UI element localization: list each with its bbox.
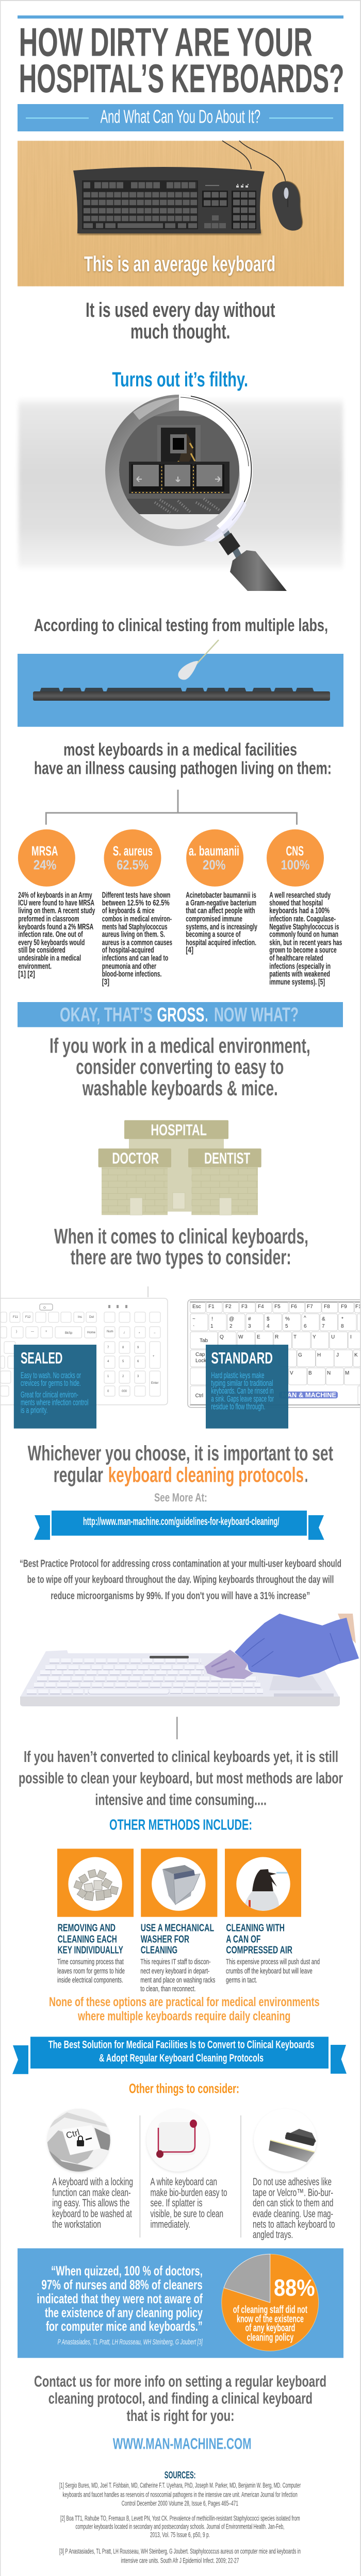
callout: sealed: ments where infection control xyxy=(21,1398,88,1408)
callout: sealed xyxy=(14,1345,96,1429)
panel: standard keyboard: W xyxy=(238,1334,243,1340)
panel: standard keyboard: F1 xyxy=(208,1304,215,1310)
banner: okay that's gross: . xyxy=(205,1004,208,1026)
text: cleaning protocols xyxy=(28,1441,333,1487)
text: the workstation xyxy=(52,2219,101,2230)
method: compressed air xyxy=(225,1849,320,1985)
panel: sealed keyboard: F12 xyxy=(25,1316,31,1319)
text column: S. aureus xyxy=(102,891,172,987)
illustration: hospital, doctor, dentist buildings: DOCTOR xyxy=(112,1149,159,1167)
text: A white keyboard can xyxy=(151,2177,217,2188)
panel: standard keyboard: F5 xyxy=(274,1304,281,1310)
quote xyxy=(37,2263,203,2334)
heading: CLEANING EACH xyxy=(58,1934,117,1945)
panel: sealed keyboard xyxy=(0,1286,168,1405)
text column: S. aureus: aureus living on them. S. xyxy=(102,930,165,939)
panel: sealed keyboard: 3 xyxy=(137,1375,139,1378)
panel: standard keyboard: 8 xyxy=(341,1324,344,1329)
pie chart: 88%: of cleaning staff did not xyxy=(233,2304,307,2315)
method: mechanical washer xyxy=(140,1849,217,1993)
text: cleaning protocols: . xyxy=(305,1463,308,1487)
callout: sealed: SEALED xyxy=(21,1349,62,1367)
pathogen: S. aureus: S. aureus xyxy=(113,844,153,859)
text column: MRSA: keyboards found a 2% MRSA xyxy=(18,923,94,931)
panel: sealed keyboard: ) xyxy=(16,1330,17,1333)
heading xyxy=(58,1922,123,1956)
text: none practical xyxy=(49,1995,320,2024)
description: nect every keyboard in depart- xyxy=(140,1967,209,1976)
panel: standard keyboard: 7 xyxy=(322,1324,325,1329)
pie chart: 88% xyxy=(222,2254,319,2351)
description: ment and place on washing racks xyxy=(140,1976,215,1985)
text column: S. aureus: ments had Staphylococcus xyxy=(102,923,168,931)
text: convert to washable xyxy=(50,1033,310,1100)
heading xyxy=(226,1922,292,1956)
heading: sources: SOURCES: xyxy=(165,2470,196,2481)
text xyxy=(151,2177,227,2230)
panel: standard keyboard: Ctrl xyxy=(195,1393,203,1399)
panel: standard keyboard: 5 xyxy=(285,1324,288,1329)
panel: standard keyboard: * xyxy=(341,1316,343,1322)
quote: the existence of any cleaning policy xyxy=(45,2305,203,2320)
panel: standard keyboard: J xyxy=(336,1352,339,1358)
callout: sealed: Great for clinical environ- xyxy=(21,1391,78,1400)
callout: standard xyxy=(206,1345,288,1429)
text column: CNS: immune systems). [5] xyxy=(269,978,325,987)
pathogen: MRSA: 24% xyxy=(34,858,56,872)
panel: standard keyboard: Y xyxy=(313,1334,316,1340)
sources list: intensive care units. South Afr J Epidemiol Infect. 2009; 22-27 xyxy=(121,2556,239,2564)
text column: MRSA: undesirable in a medical xyxy=(18,954,81,962)
description: germs in tact. xyxy=(226,1976,257,1985)
subtitle band xyxy=(18,104,343,131)
heading: other methods: OTHER METHODS INCLUDE: xyxy=(109,1817,252,1834)
text: angled trays. xyxy=(253,2229,293,2241)
quote: indicated that they were not aware of xyxy=(37,2291,203,2307)
panel: standard keyboard: 3 xyxy=(248,1324,251,1329)
description: leaves room for germs to hide xyxy=(57,1967,125,1976)
icon: ctrl key with lock: Ctrl xyxy=(65,2127,81,2141)
pathogen: MRSA: MRSA xyxy=(31,844,58,859)
brand label: MAN & MACHINE xyxy=(282,1391,336,1399)
panel: sealed keyboard: 5 xyxy=(122,1360,124,1363)
pathogen: CNS: CNS xyxy=(286,844,304,859)
panel: sealed keyboard: + xyxy=(45,1330,47,1333)
heading: A CAN OF xyxy=(226,1934,260,1945)
text column: a. baumanii: Acinetobacter baumannii is xyxy=(186,891,256,900)
text column: a. baumanii: systems, and is increasingly xyxy=(186,923,257,931)
text: contact us xyxy=(34,2372,326,2425)
text column: S. aureus: infections and can lead to xyxy=(102,954,168,962)
sources list: Control December 2000 Volume 28, Issue 6, Pages 465–471 xyxy=(122,2499,238,2507)
description: crumbs off the keyboard but will leave xyxy=(226,1967,313,1976)
panel: standard keyboard: N xyxy=(327,1370,331,1376)
text column: S. aureus: Different tests have shown xyxy=(102,891,170,900)
text column: S. aureus: combos in medical environ- xyxy=(102,915,172,924)
attribution: P Anastasiades, TL Pratt, LH Rousseau, WH Steinberg, G Joubert [3] xyxy=(58,2338,203,2347)
text column: CNS: infections (especially in xyxy=(269,962,331,971)
panel: standard keyboard xyxy=(188,1300,361,1408)
panel: sealed keyboard: / xyxy=(124,1332,125,1335)
banner: okay that's gross xyxy=(18,1002,343,1027)
method: removing keys xyxy=(57,1849,134,1985)
connector lines xyxy=(46,790,297,825)
text column: MRSA: 24% of keyboards in an Army xyxy=(18,891,92,900)
text: ing easy. This allows the xyxy=(52,2198,129,2209)
title block xyxy=(18,15,344,101)
text column: MRSA: ICU were found to have MRSA xyxy=(18,899,94,907)
computer mouse xyxy=(272,181,302,231)
panel: standard keyboard: H xyxy=(317,1352,321,1358)
divider line xyxy=(176,1717,178,1739)
panel: sealed keyboard: 2 xyxy=(122,1375,124,1378)
panel: standard keyboard: ~ xyxy=(192,1316,195,1322)
text column: S. aureus: blood-borne infections. xyxy=(102,970,161,979)
illustration: hospital, doctor, dentist buildings xyxy=(99,1120,261,1215)
pie chart: 88%: know of the existence xyxy=(237,2313,304,2325)
panel: standard keyboard: ` xyxy=(193,1325,194,1331)
description: Time consuming process that xyxy=(57,1958,124,1967)
text: not converted yet: intensive and time consuming.... xyxy=(95,1790,267,1808)
text column: MRSA xyxy=(18,891,95,979)
dividers xyxy=(140,2115,241,2238)
text column: MRSA: living on them. A recent study xyxy=(18,907,95,916)
text column: S. aureus: aureus is a common causes xyxy=(102,938,172,947)
panel: standard keyboard: Q xyxy=(220,1334,224,1340)
heading: KEY INDIVIDUALLY xyxy=(58,1944,123,1956)
text column: MRSA: still be considered xyxy=(18,946,65,955)
sources list: 2013, Vol. 75 Issue 6, p50, 9 p. xyxy=(150,2531,210,2538)
panel: swab testing keyboard xyxy=(18,640,343,727)
illustration: hospital, doctor, dentist buildings: DENTIST xyxy=(204,1149,250,1167)
description: to clean, than reconnect. xyxy=(140,1985,196,1993)
description xyxy=(140,1958,215,1993)
quote: 97% of nurses and 88% of cleaners xyxy=(41,2277,203,2292)
callout: sealed: is a priority. xyxy=(21,1406,47,1415)
panel: sealed keyboard: + xyxy=(153,1355,155,1358)
callout: standard: typing similar to traditional xyxy=(211,1379,273,1388)
text column: S. aureus: of hospital-acquired xyxy=(102,946,154,955)
icon: compressed air can xyxy=(245,1869,288,1911)
panel: standard keyboard: $ xyxy=(267,1316,270,1322)
callout: standard: residue to flow through. xyxy=(211,1402,265,1412)
banner: okay that's gross: NOW WHAT? xyxy=(214,1004,299,1026)
ribbon: url xyxy=(34,1511,324,1540)
panel: standard keyboard: @ xyxy=(229,1316,234,1322)
panel: standard keyboard: F9 xyxy=(341,1304,347,1310)
gray panel with magnifying glass xyxy=(19,395,343,591)
callout: standard: keyboards. Can be rinsed in xyxy=(211,1386,273,1396)
blue glove xyxy=(235,1614,359,1677)
description: inside electrical components. xyxy=(57,1976,123,1985)
callout: standard: Hard plastic keys make xyxy=(211,1371,264,1380)
text column: a. baumanii: becoming a source of xyxy=(186,930,241,939)
panel: standard keyboard: # xyxy=(248,1316,251,1322)
text column: MRSA: every 50 keyboards would xyxy=(18,938,85,947)
keyboard shadow xyxy=(78,230,261,235)
text: pathogen statement xyxy=(34,740,332,778)
panel: standard keyboard: Lock xyxy=(195,1358,207,1364)
website url: WWW.MAN-MACHINE.COM xyxy=(113,2435,252,2452)
text column: CNS: of healthcare related xyxy=(269,954,323,962)
text column: MRSA: environment. xyxy=(18,962,52,971)
text column: a. baumanii: [4] xyxy=(186,946,193,955)
callout: standard: a sink. Gaps leave space for xyxy=(211,1395,274,1404)
photo: gloved hand wiping clinical keyboard xyxy=(20,1614,359,1706)
panel: quiz statistic xyxy=(18,2248,343,2358)
text: A keyboard with a locking xyxy=(52,2177,133,2188)
panel: standard keyboard: F6 xyxy=(291,1304,297,1310)
panel: sealed keyboard: 1 xyxy=(107,1375,109,1378)
quote: for computer mice and keyboards.” xyxy=(46,2318,203,2334)
pathogen: a. baumanii xyxy=(186,829,243,887)
text: visible, be sure to clean xyxy=(151,2208,223,2219)
magnifier lens contents xyxy=(116,407,242,531)
panel: sealed keyboard: 0 xyxy=(107,1390,109,1393)
panel: standard keyboard: U xyxy=(331,1334,335,1340)
pathogen: MRSA xyxy=(18,829,75,887)
description xyxy=(226,1958,320,1985)
pathogen: S. aureus: 62.5% xyxy=(117,858,149,872)
text column: CNS: patients with weakened xyxy=(269,970,330,979)
description: This requires IT staff to discon- xyxy=(140,1958,210,1967)
mouse cords xyxy=(222,141,286,181)
text: see. If splatter is xyxy=(151,2198,202,2209)
text column: a. baumanii: compromised immune xyxy=(186,915,242,924)
text: two types xyxy=(54,1224,308,1269)
panel: standard keyboard: Cap xyxy=(195,1352,205,1358)
pie chart: 88%: of any keyboard xyxy=(245,2323,295,2334)
panel: standard keyboard: % xyxy=(285,1316,290,1322)
panel: standard keyboard: R xyxy=(275,1334,278,1340)
heading: WASHER FOR xyxy=(141,1934,189,1945)
panel: standard keyboard: F8 xyxy=(324,1304,330,1310)
panel: standard keyboard: T xyxy=(293,1334,297,1340)
panel: sealed keyboard: 000 xyxy=(122,1390,127,1393)
panel: standard keyboard: 1 xyxy=(210,1324,214,1329)
panel: sealed keyboard: Del xyxy=(89,1316,94,1319)
callout: standard: STANDARD xyxy=(211,1349,273,1367)
text: see more at: See More At: xyxy=(154,1490,207,1504)
tip: white keyboard xyxy=(146,2109,227,2230)
panel: sealed keyboard: — xyxy=(31,1330,34,1333)
text: used every day xyxy=(86,299,275,343)
pathogen: a. baumanii: 20% xyxy=(203,858,226,872)
pathogen: S. aureus xyxy=(104,829,161,887)
text column: CNS: keyboards had a 100% xyxy=(269,907,330,916)
text: contact us: that is right for you: xyxy=(127,2406,234,2425)
text column: a. baumanii: a Gram-negative bacterium xyxy=(186,899,256,907)
wiping cloth xyxy=(205,1650,253,1679)
text column: S. aureus: pneumonia and other xyxy=(102,962,156,971)
heading: COMPRESSED AIR xyxy=(226,1944,292,1956)
text xyxy=(253,2177,335,2241)
text column: S. aureus: between 12.5% to 62.5% xyxy=(102,899,170,907)
panel: sealed keyboard: 6 xyxy=(137,1360,139,1363)
panel: sealed keyboard: 8 xyxy=(122,1346,124,1349)
magnifier handle xyxy=(220,524,241,558)
text column: CNS: showed that hospital xyxy=(269,899,323,907)
panel: standard keyboard: F4 xyxy=(258,1304,264,1310)
panel: sealed keyboard: Enter xyxy=(151,1382,158,1385)
text column: S. aureus: of keyboards & mice xyxy=(102,907,155,916)
text column: MRSA: [1] [2] xyxy=(18,970,35,979)
tip: no adhesives xyxy=(253,2109,335,2241)
panel: standard keyboard: ! xyxy=(211,1316,213,1322)
panel: standard keyboard: V xyxy=(290,1370,293,1376)
illustration: hospital, doctor, dentist buildings: HOSPITAL xyxy=(151,1121,207,1139)
keyboard side view xyxy=(33,688,330,701)
panel: standard keyboard: I xyxy=(350,1334,352,1340)
text: used every day: much thought. xyxy=(130,320,230,343)
panel: standard keyboard: F3 xyxy=(241,1304,248,1310)
panel: standard keyboard: ^ xyxy=(304,1315,306,1321)
text column: MRSA: infection rate. One out of xyxy=(18,930,83,939)
callout: sealed: crevices for germs to hide. xyxy=(21,1379,81,1388)
panel: sealed keyboard: ⏻ xyxy=(43,1306,46,1310)
magnifier ring xyxy=(105,395,253,546)
text: function can make clean- xyxy=(52,2187,131,2198)
text column: CNS xyxy=(269,891,342,987)
banner: okay that's gross: GROSS xyxy=(157,1004,204,1026)
heading: CLEANING WITH xyxy=(226,1922,285,1934)
panel: standard keyboard: F2 xyxy=(225,1304,232,1310)
panel: standard keyboard: Tab xyxy=(200,1338,208,1344)
photo: keyboard and mouse on wood desk xyxy=(18,141,344,286)
panel: standard keyboard: K xyxy=(354,1352,358,1358)
panel: standard keyboard: 2 xyxy=(229,1324,233,1329)
panel: sealed keyboard: BkSp xyxy=(65,1332,73,1335)
description xyxy=(57,1958,125,1985)
panel: standard keyboard: E xyxy=(257,1334,260,1340)
heading: REMOVING AND xyxy=(58,1922,116,1934)
panel: sealed keyboard: 7 xyxy=(107,1346,109,1349)
panel: sealed keyboard: * xyxy=(139,1332,140,1335)
pathogen: a. baumanii: a. baumanii xyxy=(189,844,239,859)
heading: filthy: Turns out it’s filthy. xyxy=(112,368,248,391)
panel: standard keyboard: G xyxy=(298,1352,302,1358)
panel: sealed keyboard: Ins xyxy=(78,1316,82,1319)
panel: standard keyboard: 4 xyxy=(267,1324,270,1329)
sources list xyxy=(59,2481,301,2576)
text column: S. aureus: [3] xyxy=(102,978,109,987)
panel: standard keyboard: M xyxy=(345,1370,349,1376)
text column: a. baumanii xyxy=(186,891,257,955)
pie chart: 88%: cleaning policy xyxy=(247,2332,294,2343)
panel: standard keyboard: F7 xyxy=(307,1304,313,1310)
quote: best practice protocol xyxy=(20,1558,341,1602)
heading: CLEANING xyxy=(141,1944,177,1956)
text: make bio-burden easy to xyxy=(151,2187,227,2198)
icon: angled tray magnet xyxy=(269,2129,316,2162)
panel: sealed keyboard: Num xyxy=(107,1330,113,1333)
quote: “When quizzed, 100 % of doctors, xyxy=(51,2263,203,2279)
ribbon: best solution xyxy=(12,2037,347,2074)
icon: ctrl key with lock xyxy=(47,2110,110,2172)
panel: sealed keyboard: 9 xyxy=(137,1346,139,1349)
ribbon: best solution: & Adopt Regular Keyboard Cleaning Protocols xyxy=(99,2053,264,2064)
text: cleaning protocols: regular xyxy=(54,1463,103,1487)
black keyboard xyxy=(73,167,265,233)
heading xyxy=(141,1922,214,1956)
banner: okay that's gross: OKAY, THAT’S xyxy=(60,1004,153,1026)
icon: white key with red stain xyxy=(156,2120,197,2158)
subtitle band: And What Can You Do About It? xyxy=(101,106,260,127)
text xyxy=(52,2177,133,2230)
pie chart: 88%: 88% xyxy=(274,2275,315,2301)
panel: standard keyboard: & xyxy=(322,1316,325,1322)
text column: CNS: A well researched study xyxy=(269,891,331,900)
panel: sealed keyboard: − xyxy=(154,1332,156,1335)
hand skin xyxy=(338,1614,356,1643)
callout: sealed: Easy to wash. No cracks or xyxy=(21,1371,81,1380)
panel: standard keyboard: Esc xyxy=(192,1304,201,1310)
panel: standard keyboard: 6 xyxy=(304,1324,307,1329)
text: immediately. xyxy=(151,2219,190,2230)
panel: standard keyboard: B xyxy=(308,1370,312,1376)
text: used every day: It is used every day without xyxy=(86,299,275,321)
pathogen: CNS xyxy=(267,829,324,887)
heading: other things: Other things to consider: xyxy=(129,2081,239,2096)
panel: sealed keyboard: 4 xyxy=(107,1360,109,1363)
icon: dishwasher xyxy=(162,1865,200,1905)
text: keyboard to be washed at xyxy=(52,2208,132,2219)
text: not converted yet xyxy=(19,1748,343,1808)
heading: USE A MECHANICAL xyxy=(141,1922,214,1934)
pathogen: CNS: 100% xyxy=(281,858,309,872)
panel: sealed keyboard: Home xyxy=(87,1331,96,1334)
icon: cotton swab xyxy=(178,640,219,680)
text column: a. baumanii: hospital acquired infection. xyxy=(186,938,256,947)
text column: MRSA: preformed in classroom xyxy=(18,915,79,924)
tip: locking keyboard xyxy=(46,2107,133,2230)
text column: a. baumanii: that can affect people with xyxy=(186,907,255,916)
panel: sealed keyboard: F11 xyxy=(13,1316,19,1319)
icon: pile of keycaps xyxy=(74,1869,119,1901)
